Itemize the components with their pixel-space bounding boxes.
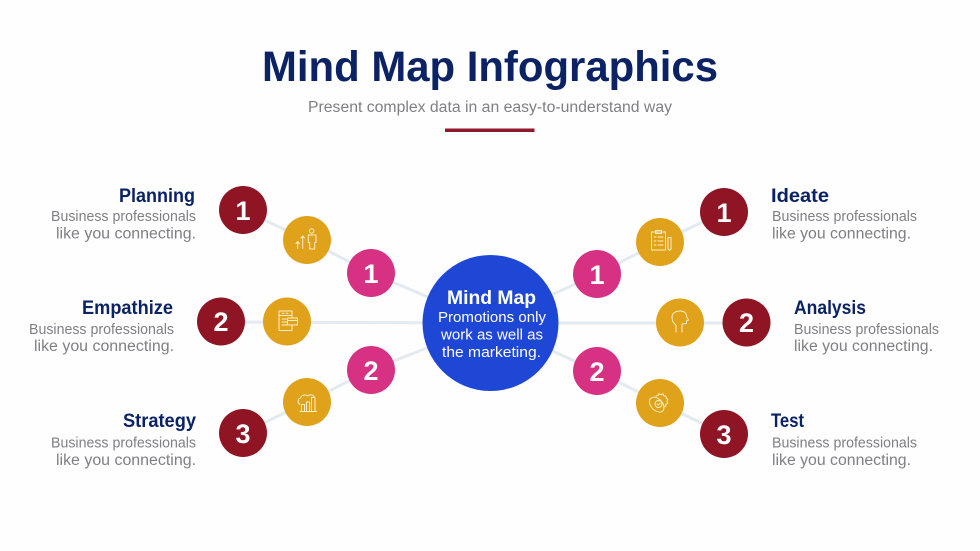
icon: document with card	[263, 298, 311, 346]
node: Analysis: Analysis	[794, 298, 866, 319]
node: Planning: Planning	[119, 186, 195, 207]
node: Analysis: like you connecting.	[794, 338, 933, 355]
node: Test: Test	[771, 411, 805, 432]
icon: cloud bar chart	[283, 378, 331, 426]
node: Test: Business professionals	[772, 436, 917, 452]
node: Planning	[51, 186, 267, 242]
icon: clipboard checklist and pencil	[636, 218, 684, 266]
pink node: left 1	[347, 249, 395, 297]
node: Empathize: 2	[213, 307, 229, 337]
central node: Mind Map: Mind Map	[447, 288, 536, 309]
node: Planning: like you connecting.	[56, 226, 196, 242]
node: Ideate: 1	[716, 198, 732, 228]
icon: gear with check shield	[636, 379, 684, 427]
node: Empathize: Empathize	[82, 298, 173, 319]
node: Strategy: Strategy	[123, 411, 196, 432]
node: Ideate	[700, 186, 917, 242]
node: Planning: Business professionals	[51, 209, 196, 225]
node: Ideate: Business professionals	[772, 209, 917, 225]
node: Test: 3	[716, 420, 732, 450]
node: Planning: 1	[235, 196, 251, 226]
central node: Mind Map: the marketing.	[442, 344, 541, 361]
pink node: right 2	[573, 347, 621, 395]
node: Analysis: Business professionals	[794, 322, 939, 338]
central node: Mind Map	[422, 255, 558, 391]
pink node: right 1	[573, 250, 621, 298]
title: Mind Map Infographics	[262, 43, 718, 91]
node: Ideate: like you connecting.	[772, 226, 911, 242]
node: Strategy: 3	[235, 419, 251, 449]
icon: head profile	[656, 298, 704, 346]
pink node: right 1: 1	[589, 260, 605, 290]
node: Empathize	[29, 298, 245, 355]
pink node: right 2: 2	[589, 357, 605, 387]
node: Strategy: like you connecting.	[56, 452, 196, 469]
pink node: left 2: 2	[363, 356, 379, 386]
node: Analysis: 2	[739, 308, 754, 338]
node: Ideate: Ideate	[771, 186, 829, 207]
central node: Mind Map: Promotions only	[438, 309, 546, 326]
subtitle: Present complex data in an easy-to-understand way	[308, 99, 672, 116]
node: Empathize: Business professionals	[29, 322, 174, 338]
node: Test	[700, 410, 917, 469]
icon: person with growth arrows	[283, 216, 331, 264]
node: Empathize: like you connecting.	[34, 338, 174, 355]
node: Strategy: Business professionals	[51, 436, 196, 452]
pink node: left 1: 1	[363, 259, 379, 289]
pink node: left 2	[347, 346, 395, 394]
node: Strategy	[51, 409, 267, 469]
node: Test: like you connecting.	[772, 452, 911, 469]
node: Analysis	[722, 298, 939, 355]
central node: Mind Map: work as well as	[440, 326, 543, 344]
title underline	[445, 128, 534, 132]
